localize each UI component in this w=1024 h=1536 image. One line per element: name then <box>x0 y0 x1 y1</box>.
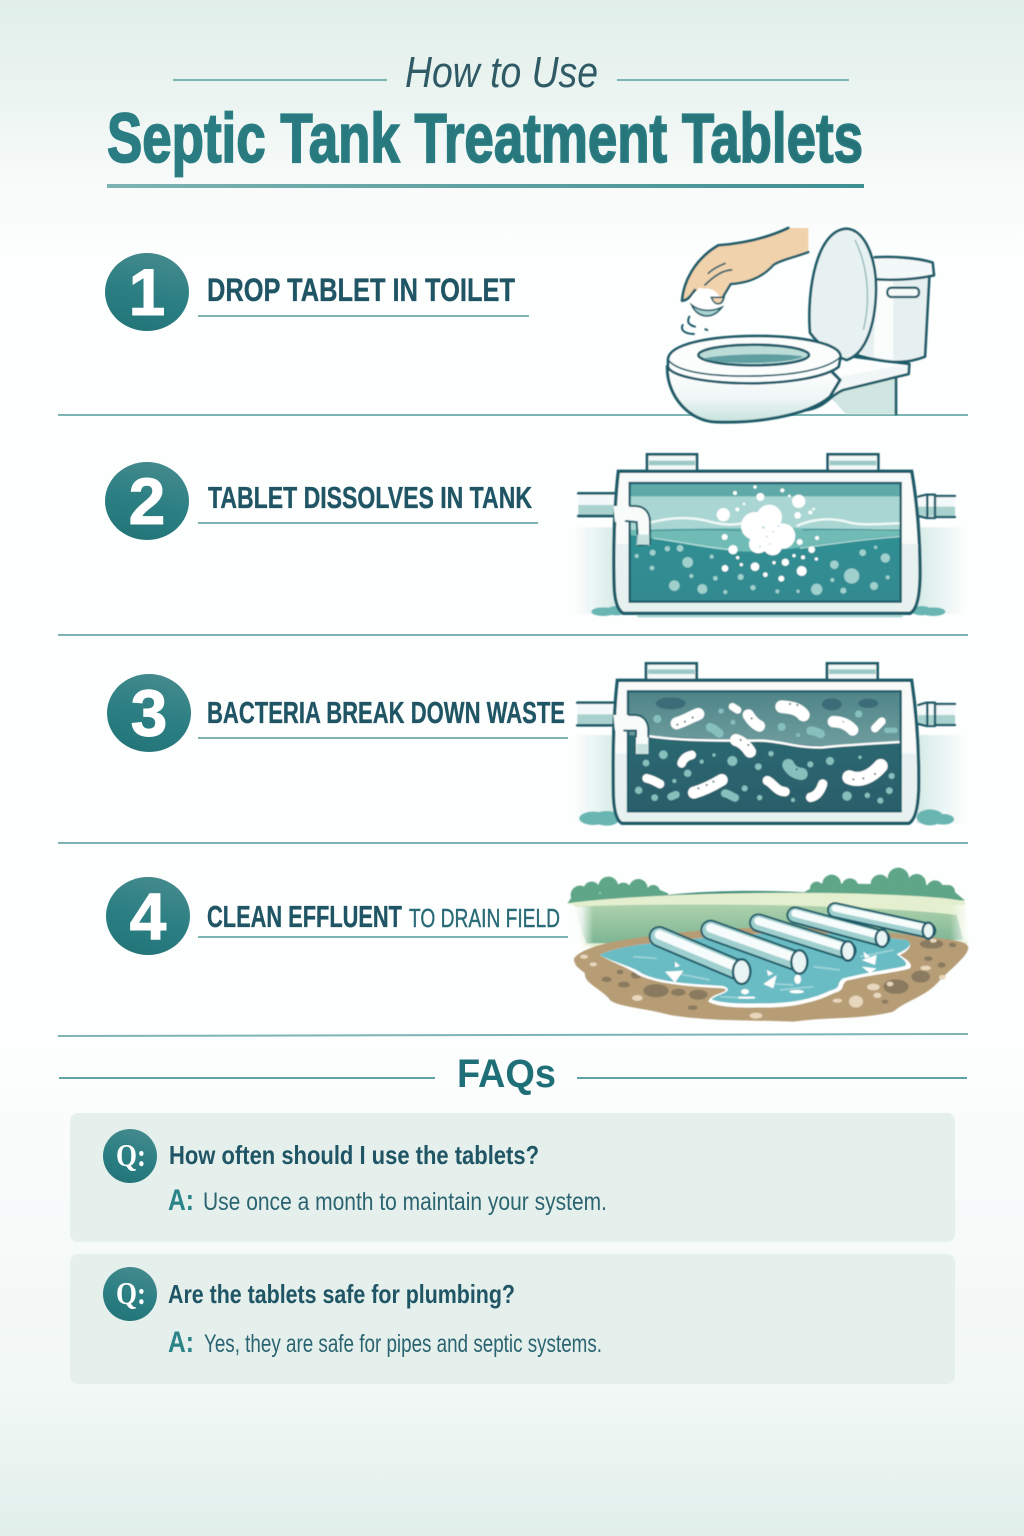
soil <box>574 928 968 1022</box>
scum blobs <box>656 697 878 710</box>
FAQs heading: FAQs <box>457 1052 556 1096</box>
answer 2: A: <box>168 1326 194 1359</box>
step 2 label: TABLET DISSOLVES IN TANK <box>208 480 532 515</box>
manholes <box>647 454 878 473</box>
raised lid <box>809 229 876 360</box>
question 1: How often should I use the tablets? <box>169 1140 539 1170</box>
Q badge 2 <box>103 1267 157 1321</box>
step 2 row <box>58 454 968 635</box>
Q badge 1: Q: <box>116 1137 146 1173</box>
tank shell <box>613 680 919 823</box>
icon: toilet with hand dropping tablet <box>667 228 934 422</box>
white bubbles <box>717 485 819 582</box>
bacteria speckles <box>676 703 876 789</box>
step 3 number badge: 3 <box>131 676 167 750</box>
answer 2: Yes, they are safe for pipes and septic systems. <box>204 1330 602 1358</box>
drain pipes, back to front <box>835 908 934 939</box>
step 4 label: CLEAN EFFLUENT <box>207 899 402 934</box>
splashes <box>665 952 877 999</box>
hand <box>682 228 808 303</box>
tank shell <box>614 471 920 613</box>
step 2 number badge: 2 <box>129 464 165 538</box>
bowl opening <box>698 345 809 365</box>
Q badge 2: Q: <box>116 1275 146 1311</box>
effluent water <box>599 933 911 1008</box>
step 1 label: DROP TABLET IN TOILET <box>207 272 515 308</box>
step 4 label: TO DRAIN FIELD <box>409 903 560 933</box>
panel: FAQ 2 <box>70 1254 955 1384</box>
Q badge 1 <box>103 1129 157 1183</box>
subtitle: How to Use: How to Use <box>405 48 598 97</box>
step 3 label: BACTERIA BREAK DOWN WASTE <box>207 695 565 730</box>
inlet pipe <box>578 493 615 516</box>
sludge and liquid layers <box>628 691 901 811</box>
faded particles and bacteria <box>635 708 895 804</box>
outlet pipe <box>918 495 955 518</box>
illustration: tablet dissolving in septic tank <box>573 454 967 617</box>
illustration: bacteria in septic tank <box>573 663 967 826</box>
step 2 number badge <box>105 462 189 540</box>
answer 1 <box>168 1184 607 1217</box>
title block <box>107 48 864 188</box>
bowl <box>667 367 840 422</box>
step 3 number badge <box>107 674 191 752</box>
step 4 row <box>58 868 970 1036</box>
step 1 number badge: 1 <box>129 255 165 329</box>
outlet pipe <box>918 703 955 726</box>
seat <box>668 336 841 383</box>
tablet <box>690 288 721 317</box>
white bacteria <box>647 707 882 797</box>
step 4 number badge <box>106 877 190 955</box>
falling motion marks <box>682 317 707 334</box>
inlet baffle <box>613 715 648 754</box>
step 1 row <box>58 228 968 422</box>
inlet pipe <box>577 703 614 725</box>
pedestal <box>827 373 898 414</box>
dissolving tablet cloud <box>741 505 795 555</box>
inlet baffle <box>613 506 650 545</box>
illustration: drain field pipes <box>567 868 970 1022</box>
manholes <box>646 663 878 682</box>
stones <box>602 939 956 1010</box>
step 3 row <box>58 663 968 843</box>
answer 1: A: <box>168 1184 194 1217</box>
panel: FAQ 1 <box>70 1113 955 1242</box>
water layers <box>630 483 901 602</box>
step 4 number badge: 4 <box>130 879 167 953</box>
faded bubbles <box>635 545 890 595</box>
question 2: Are the tablets safe for plumbing? <box>168 1279 515 1309</box>
tank <box>860 273 929 362</box>
meadow <box>567 893 968 947</box>
trees <box>567 868 965 904</box>
answer 1: Use once a month to maintain your system. <box>203 1188 607 1216</box>
step 1 number badge <box>105 253 189 331</box>
answer 2 <box>168 1326 602 1359</box>
